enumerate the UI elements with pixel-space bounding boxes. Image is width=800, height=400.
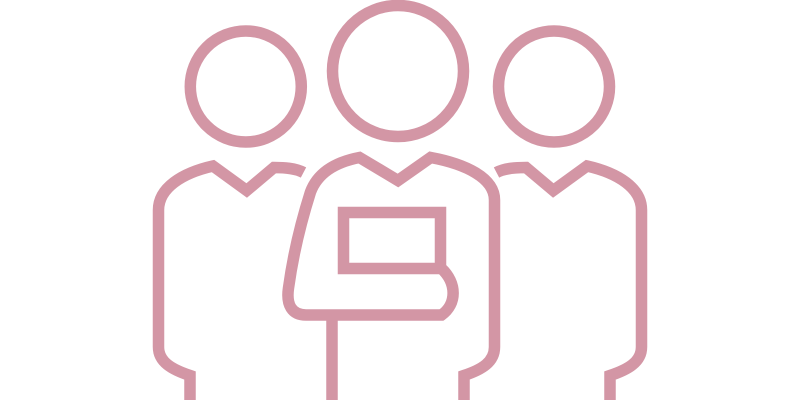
centre person head (332, 6, 464, 136)
right person (496, 31, 642, 400)
right person head (498, 31, 610, 142)
centre person (288, 6, 494, 400)
right person body (496, 166, 642, 400)
left person body (158, 166, 304, 400)
centre person lower torso line (326, 315, 338, 400)
centre person body and folded arm (288, 158, 494, 400)
left person head (190, 31, 301, 142)
left person (158, 31, 304, 400)
